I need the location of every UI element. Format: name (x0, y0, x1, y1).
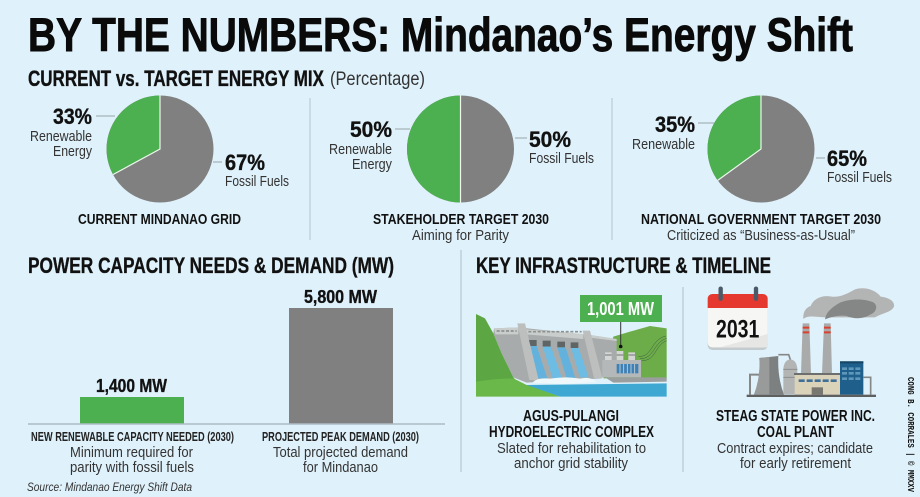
heading: current vs target energy mix: CURRENT vs. TARGET ENERGY MIX (28, 66, 324, 91)
caption: Agus-Pulangi complex: anchor grid stability (514, 455, 628, 472)
bar label: new renewable capacity: Minimum required for (70, 444, 193, 461)
pie chart: current grid 33/67 (106, 96, 214, 202)
callout: 1,001 MW (580, 295, 662, 348)
pie chart: stakeholder target 50/50 (407, 96, 514, 202)
icon: calendar 2031 (708, 289, 768, 350)
label: 33% renewable energy (30, 104, 115, 160)
caption: national government target 2030 (641, 211, 881, 244)
bar: projected peak demand (289, 287, 393, 424)
label: 35% renewable: 35% (655, 112, 695, 137)
bar label: projected peak demand: PROJECTED PEAK DEMAND (2030) (262, 429, 419, 444)
panel: national government target 2030 (632, 96, 892, 244)
caption: stakeholder target 2030 (373, 211, 549, 244)
pie chart: national target 35/65 (708, 96, 814, 202)
label: 33% renewable energy: Renewable (30, 128, 92, 145)
bar label: projected peak demand: for Mindanao (303, 459, 378, 476)
callout: 1,001 MW: 1,001 MW (587, 299, 654, 319)
label: 65% fossil fuels: 65% (827, 146, 867, 171)
bar label: projected peak demand: Total projected demand (273, 444, 408, 461)
bar label: projected peak demand (262, 429, 419, 476)
caption: stakeholder target 2030: STAKEHOLDER TARGET 2030 (373, 211, 549, 228)
caption: stakeholder target 2030: Aiming for Parity (412, 227, 509, 244)
caption: Agus-Pulangi complex: HYDROELECTRIC COMPLEX (489, 424, 654, 441)
source note: Source: Mindanao Energy Shift Data (27, 480, 192, 494)
label: 50% fossil fuels: 50% (529, 127, 571, 152)
bar: new renewable capacity: 1,400 MW (96, 376, 167, 396)
label: 35% renewable: Renewable (632, 136, 695, 153)
bar label: new renewable capacity: NEW RENEWABLE CAPACITY NEEDED (2030) (31, 429, 234, 444)
label: 65% fossil fuels: Fossil Fuels (827, 169, 892, 186)
icon: calendar 2031: 2031 (716, 315, 759, 343)
label: 35% renewable (632, 112, 714, 153)
label: 50% renewable energy: 50% (350, 117, 392, 142)
caption: STEAG coal plant: for early retirement (740, 455, 852, 472)
caption: STEAG coal plant: COAL PLANT (757, 424, 834, 441)
panel: stakeholder target 2030 (329, 96, 594, 244)
heading: key infrastructure: KEY INFRASTRUCTURE & TIMELINE (476, 253, 771, 278)
label: 67% fossil fuels: 67% (225, 150, 265, 175)
bar label: new renewable capacity: parity with fossil fuels (70, 459, 194, 476)
label: 33% renewable energy: Energy (53, 143, 92, 160)
heading: current vs target energy mix: (Percentage) (330, 69, 425, 90)
label: 67% fossil fuels: Fossil Fuels (225, 173, 289, 190)
panel: current Mindanao grid (30, 96, 289, 228)
illustration: hydroelectric dam (476, 314, 667, 397)
label: 50% renewable energy: Renewable (329, 141, 392, 158)
bar label: new renewable capacity (31, 429, 234, 476)
label: 50% renewable energy (329, 117, 410, 173)
bar: projected peak demand: 5,800 MW (304, 287, 377, 307)
caption: STEAG coal plant (716, 408, 875, 472)
caption: Agus-Pulangi complex: AGUS-PULANGI (523, 408, 619, 425)
bar chart: capacity and demand (28, 287, 445, 476)
heading: power capacity: POWER CAPACITY NEEDS & DEMAND (MW) (28, 253, 394, 278)
bar: new renewable capacity (80, 376, 184, 424)
illustration: coal plant (747, 288, 894, 397)
label: 65% fossil fuels (816, 146, 892, 186)
label: 33% renewable energy: 33% (53, 104, 92, 129)
caption: STEAG coal plant: Contract expires; candidate (717, 440, 873, 457)
label: 50% fossil fuels: Fossil Fuels (529, 150, 594, 167)
label: 67% fossil fuels (213, 150, 289, 190)
label: 50% fossil fuels (515, 127, 594, 167)
caption: current Mindanao grid: CURRENT MINDANAO GRID (78, 211, 241, 228)
caption: Agus-Pulangi complex (489, 408, 654, 472)
caption: Agus-Pulangi complex: Slated for rehabilitation to (497, 440, 646, 457)
caption: national government target 2030: Criticized as “Business-as-Usual” (667, 227, 855, 244)
label: 50% renewable energy: Energy (352, 156, 392, 173)
